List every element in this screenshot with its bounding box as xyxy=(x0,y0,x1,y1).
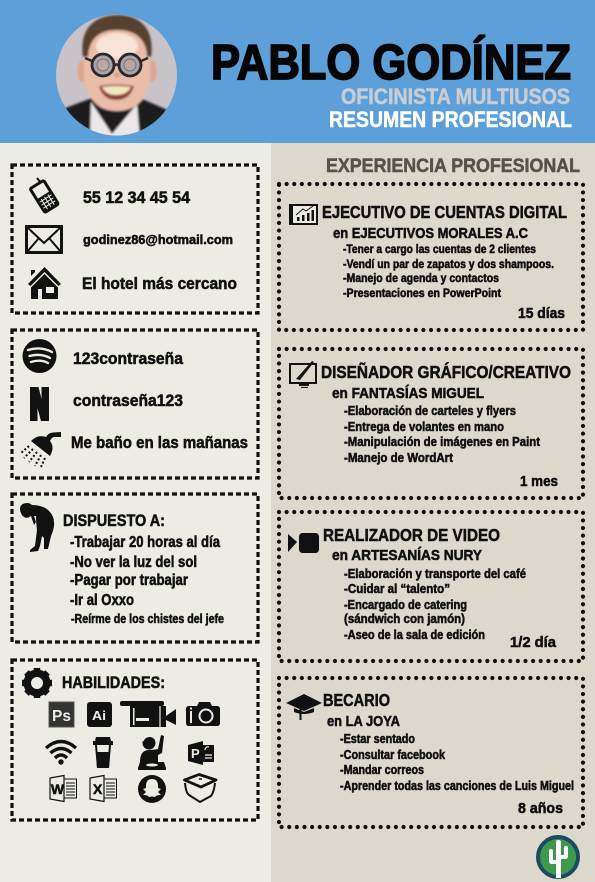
panel: job four xyxy=(279,678,583,827)
icon: house xyxy=(28,267,61,299)
company: en LA JOYA xyxy=(327,714,400,730)
list: dispuesto: -No ver la luz del sol xyxy=(70,554,197,571)
address: El hotel más cercano xyxy=(82,275,237,293)
icon: graduation cap xyxy=(286,694,322,720)
icon: video xyxy=(288,533,319,553)
panel: passwords and habits xyxy=(12,330,258,478)
icon: spotify xyxy=(22,339,56,373)
list: dispuesto: -Reírme de los chistes del jefe xyxy=(71,612,224,626)
phone number: 55 12 34 45 54 xyxy=(83,189,191,207)
job title: REALIZADOR DE VIDEO xyxy=(323,525,500,545)
panel: contact xyxy=(12,165,258,313)
duties xyxy=(344,567,526,642)
company: en ARTESANÍAS NURY xyxy=(332,547,482,564)
duties: -Cuidar al “talento” xyxy=(344,582,450,596)
list: dispuesto xyxy=(70,534,224,626)
company: en FANTASÍAS MIGUEL xyxy=(332,385,484,402)
icon: powerpoint xyxy=(188,741,214,765)
duties: -Entrega de volantes en mano xyxy=(344,420,504,434)
icon: tired man xyxy=(20,503,54,552)
duration: 15 días xyxy=(518,306,565,322)
icon: photo camera xyxy=(186,702,220,726)
icon: photoshop: Ps xyxy=(52,708,71,725)
duties: -Encargado de catering xyxy=(344,598,467,612)
right column background xyxy=(271,143,595,882)
list: dispuesto: -Trabajar 20 horas al día xyxy=(70,534,220,551)
shower note: Me baño en las mañanas xyxy=(71,434,248,452)
panel: willing to xyxy=(12,494,258,642)
heading: dispuesto a: DISPUESTO A: xyxy=(63,511,165,530)
list: dispuesto: -Pagar por trabajar xyxy=(70,572,188,589)
icon: excel xyxy=(90,776,116,802)
icon: netflix N xyxy=(30,387,49,421)
job title: BECARIO xyxy=(323,690,390,710)
icon: monitor with pen xyxy=(290,361,316,388)
duties: -Manejo de WordArt xyxy=(344,451,454,465)
icon: coffee cup xyxy=(93,737,113,768)
duties: -Tener a cargo las cuentas de 2 clientes xyxy=(343,244,536,256)
duties: -Aseo de la sala de edición xyxy=(344,628,485,642)
icon: gear xyxy=(22,668,52,698)
duties: (sándwich con jamón) xyxy=(344,612,465,626)
icon: video camera xyxy=(120,701,176,727)
company: en EJECUTIVOS MORALES A.C xyxy=(333,226,528,242)
icon: chart xyxy=(289,204,317,225)
duration: 1/2 día xyxy=(510,635,557,651)
duties: -Manipulación de imágenes en Paint xyxy=(344,435,541,449)
icon: food container xyxy=(184,774,216,802)
duties: -Estar sentado xyxy=(340,732,415,746)
duties: -Presentaciones en PowerPoint xyxy=(343,288,501,300)
panel: job one xyxy=(279,184,583,330)
panel: skills xyxy=(12,660,258,820)
icon: photoshop xyxy=(49,702,74,727)
job subtitle: OFICINISTA MULTIUSOS xyxy=(341,84,570,109)
duties xyxy=(343,244,554,300)
duties: -Elaboración y transporte del café xyxy=(344,567,526,581)
duties: -Elaboración de carteles y flyers xyxy=(344,404,516,418)
duties: -Mandar correos xyxy=(340,763,424,777)
icon: powerpoint: P xyxy=(191,746,200,761)
username one: 123contraseña xyxy=(73,350,184,368)
duties xyxy=(344,404,541,465)
icon: envelope xyxy=(26,226,62,252)
duties: -Manejo de agenda y contactos xyxy=(343,273,499,285)
icon: snapchat xyxy=(138,775,166,803)
icon: word xyxy=(50,776,76,802)
duration: 1 mes xyxy=(520,474,558,490)
icon: illustrator xyxy=(87,702,112,727)
panel: job three xyxy=(279,512,583,661)
icon: word: W xyxy=(51,781,65,797)
icon: shower xyxy=(21,432,61,467)
duration: 8 años xyxy=(518,801,563,817)
portrait photo xyxy=(56,14,177,140)
duties: -Vendí un par de zapatos y dos shampoos. xyxy=(343,259,554,271)
username two: contraseña123 xyxy=(73,392,183,410)
icon: mobile phone xyxy=(28,178,61,215)
icon: dj xyxy=(138,735,166,770)
header band xyxy=(0,0,595,143)
left column background xyxy=(0,143,271,882)
icon: illustrator: Ai xyxy=(92,708,106,723)
heading: habilidades: HABILIDADES: xyxy=(62,673,165,692)
icon: wifi xyxy=(46,742,76,765)
logo: cactus xyxy=(538,837,578,878)
list: dispuesto: -Ir al Oxxo xyxy=(70,592,134,609)
email: godinez86@hotmail.com xyxy=(83,232,233,247)
duties: -Consultar facebook xyxy=(340,748,445,762)
icon: excel: X xyxy=(93,781,103,797)
duties xyxy=(340,732,574,793)
panel: job two xyxy=(279,349,583,498)
